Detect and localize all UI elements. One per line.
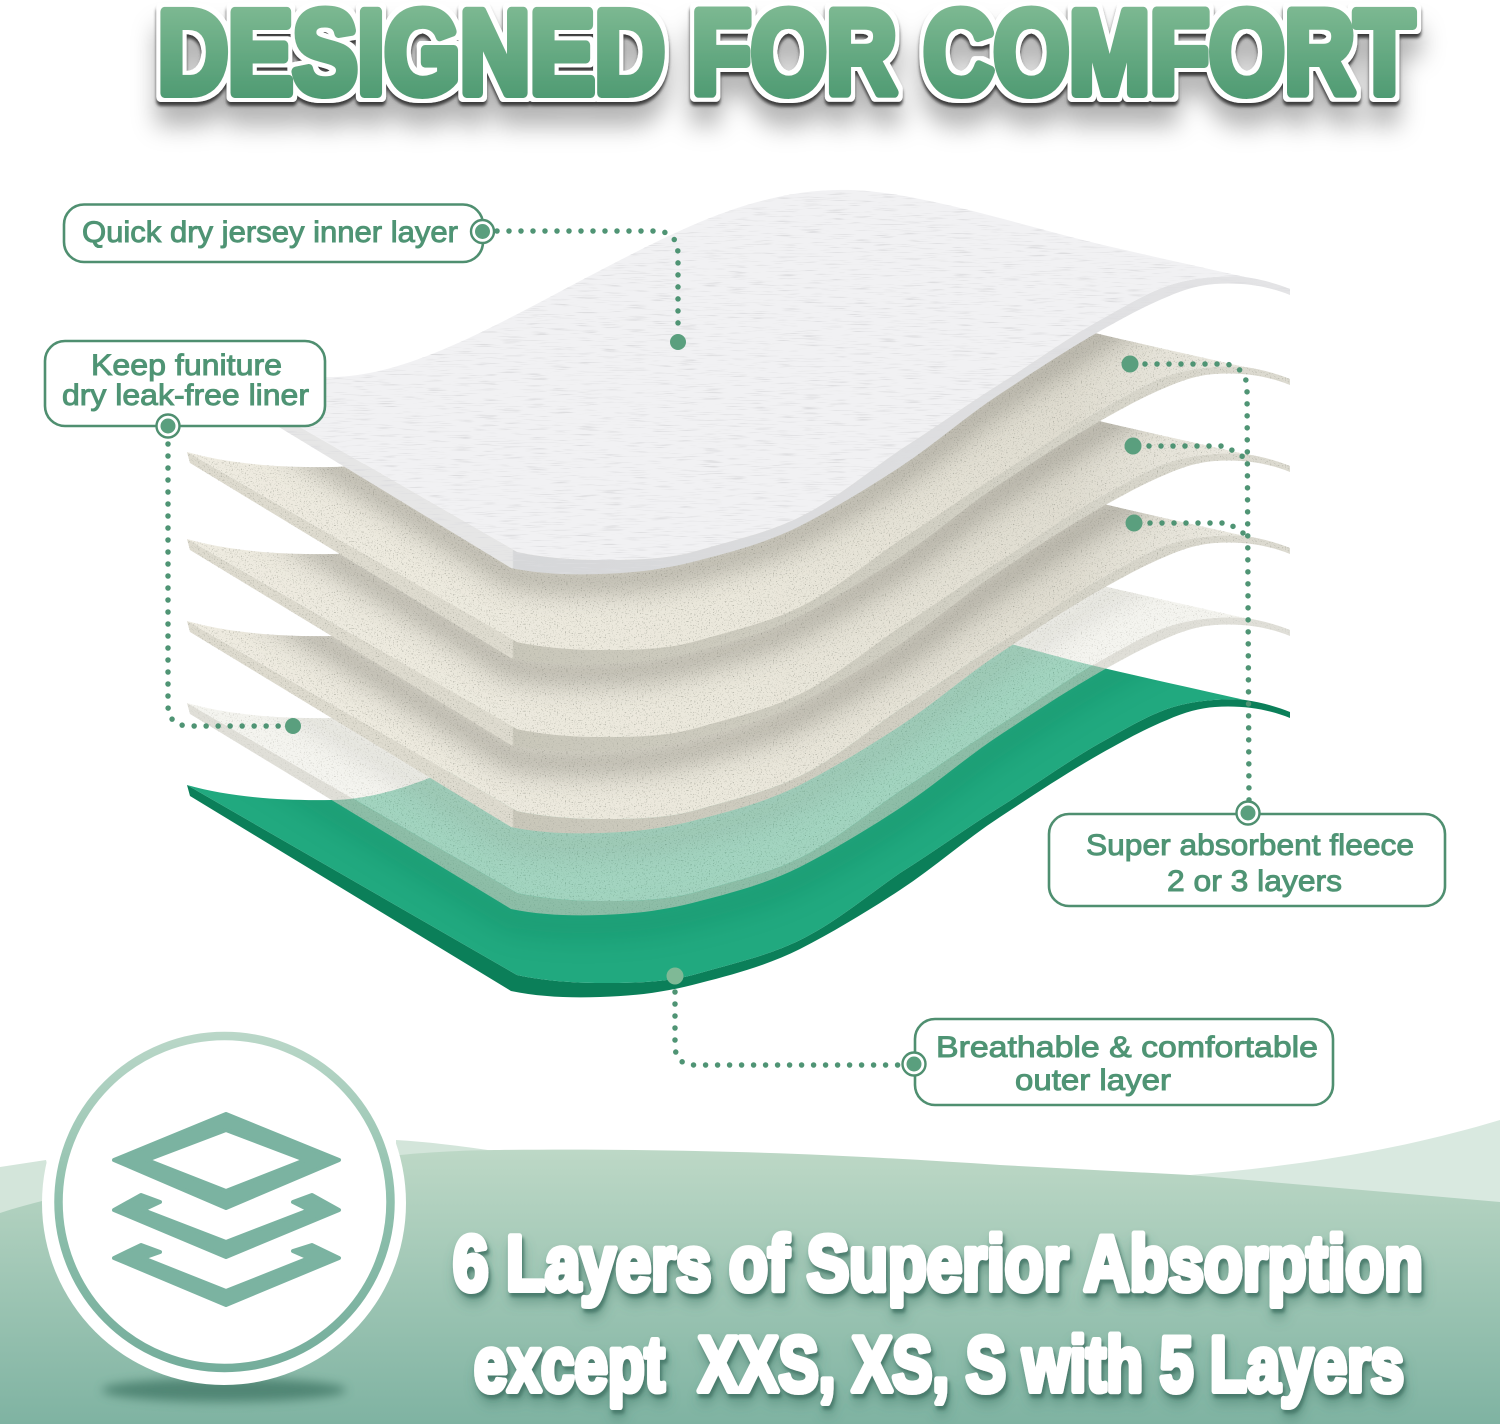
callout: super absorbent fleece: Super absorbent fleece [1086,829,1414,862]
bottom headline [453,1219,1423,1408]
leader: super absorbent fleece [1122,356,1249,800]
layer: leak-free liner [187,586,1290,916]
callout: leak-free liner [45,341,325,438]
callout: super absorbent fleece: 2 or 3 layers [1167,865,1342,898]
callout: leak-free liner: dry leak-free liner [62,379,309,412]
leader: jersey inner layer [497,231,686,350]
background hills [0,1120,1500,1424]
callout: leak-free liner: Keep funiture [91,349,282,382]
layer: white jersey top [187,190,1290,574]
layer: green breathable outer [187,613,1290,997]
badge: layers icon in circle [42,1021,406,1402]
callout: breathable outer layer: outer layer [1015,1064,1171,1097]
layer: fleece 3 [187,502,1290,834]
leader: outer layer [666,968,900,1065]
callout: breathable outer layer: Breathable & comfortable [936,1031,1318,1064]
callout: quick dry jersey [64,204,494,262]
callout: super absorbent fleece [1049,802,1445,906]
layer: fleece 1 [187,330,1290,664]
icon: stacked layers [114,1114,339,1305]
callout: breathable outer layer [902,1019,1333,1105]
leader: leak-free liner [168,444,301,734]
callout: quick dry jersey: Quick dry jersey inner layer [82,216,458,249]
layer: fleece 2 [187,418,1290,752]
layered pad diagram [187,190,1290,997]
